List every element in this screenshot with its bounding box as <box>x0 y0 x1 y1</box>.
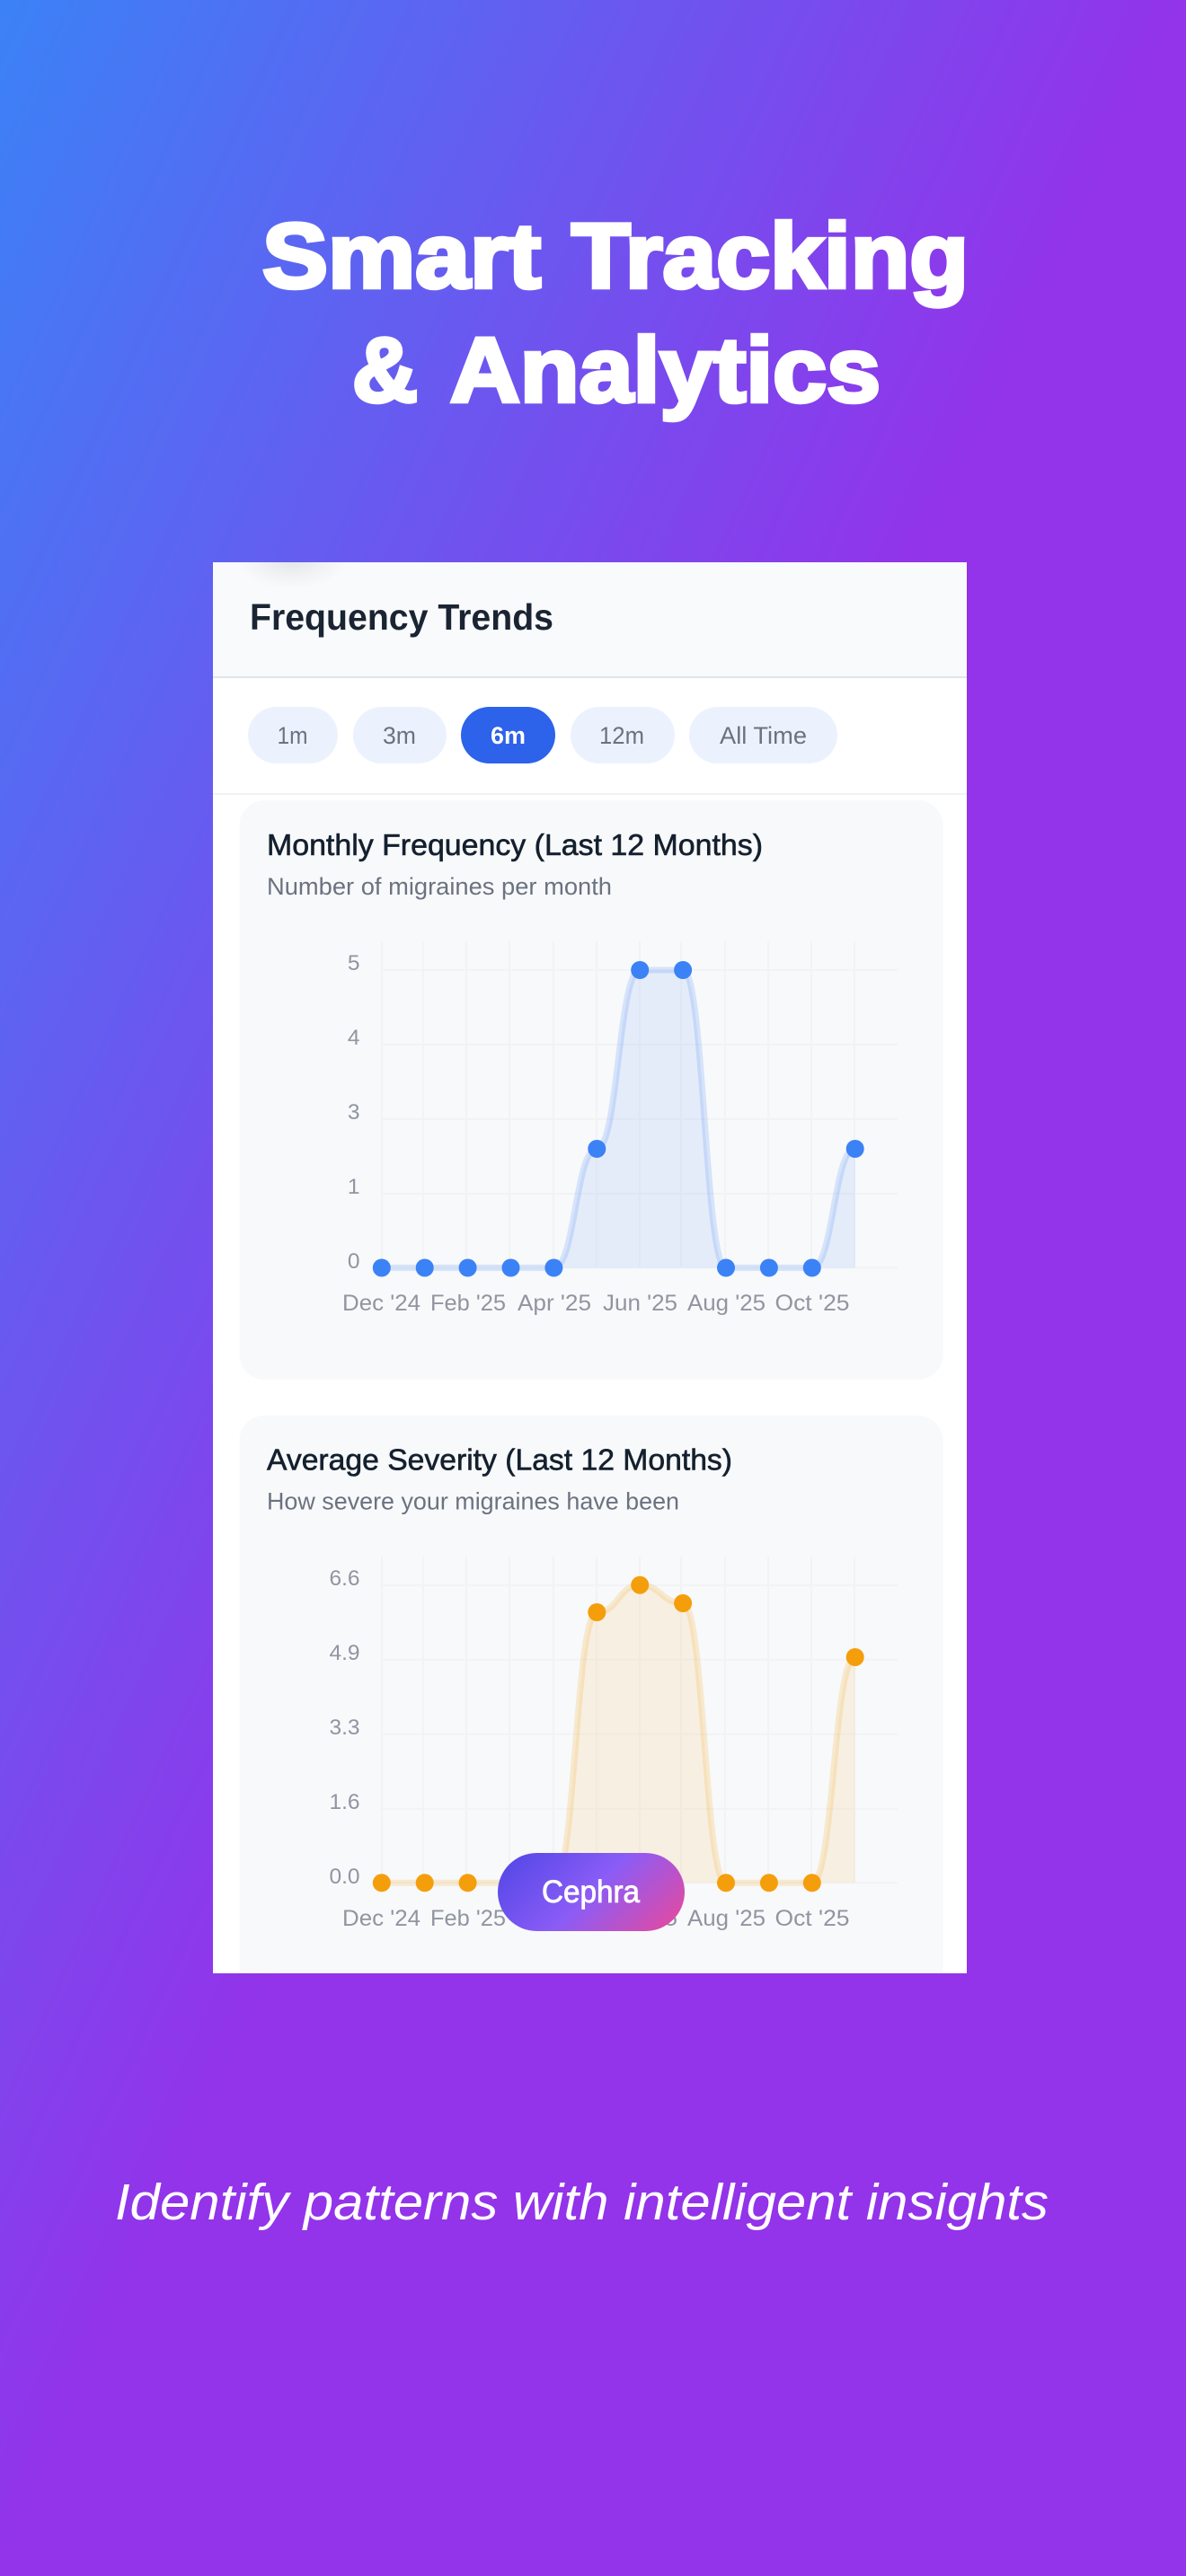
chart title: Average Severity (Last 12 Months) <box>267 1442 732 1477</box>
line chart: frequency: 5 <box>348 951 359 975</box>
panel: average severity <box>266 1448 898 1930</box>
line chart: frequency: Apr '25 <box>518 1291 591 1316</box>
line chart: severity: Jun '25 <box>603 1906 677 1931</box>
line chart: severity: 1.6 <box>329 1790 359 1814</box>
line chart: severity: 4.9 <box>329 1641 359 1665</box>
title: Tracking <box>571 205 969 307</box>
line chart: severity: Apr '25 <box>518 1906 591 1931</box>
line chart: frequency: 1 <box>348 1175 359 1199</box>
chart subtitle: How severe your migraines have been <box>267 1487 679 1514</box>
time range pills: 3m <box>383 722 416 749</box>
line chart: severity <box>329 1557 898 1931</box>
line chart: severity: 6.6 <box>329 1566 359 1591</box>
title: Smart <box>262 205 541 307</box>
line chart: frequency: Jun '25 <box>603 1291 677 1316</box>
line chart: severity: Feb '25 <box>430 1906 506 1931</box>
line chart: frequency: Aug '25 <box>687 1291 766 1316</box>
panel: app screen card <box>213 528 967 2008</box>
line chart: frequency: 4 <box>348 1026 359 1050</box>
tagline: Identify patterns with intelligent insights <box>115 2174 1049 2231</box>
line chart: frequency: Feb '25 <box>430 1291 506 1316</box>
line chart: severity: 0.0 <box>329 1865 359 1889</box>
panel: monthly frequency <box>269 834 898 1315</box>
line chart: severity: Dec '24 <box>342 1906 420 1931</box>
chart subtitle: Number of migraines per month <box>267 873 612 900</box>
line chart: severity: 3.3 <box>329 1716 359 1740</box>
title: Analytics <box>450 319 881 421</box>
line chart: severity: Oct '25 <box>774 1906 850 1931</box>
line chart: severity: Aug '25 <box>687 1906 766 1931</box>
screen header: Frequency Trends <box>250 596 553 638</box>
title <box>262 205 969 421</box>
time range pills: 6m <box>491 722 526 749</box>
line chart: frequency: Oct '25 <box>774 1291 850 1316</box>
line chart: frequency <box>344 956 864 1315</box>
title: & <box>352 319 418 421</box>
time range pills <box>248 707 837 763</box>
chart title: Monthly Frequency (Last 12 Months) <box>267 828 763 861</box>
button: Cephra <box>498 1853 685 1931</box>
button: Cephra: Cephra <box>542 1875 641 1910</box>
line chart: frequency: Dec '24 <box>342 1291 420 1316</box>
time range pills: 1m <box>277 722 307 749</box>
time range pills: All Time <box>720 722 807 749</box>
line chart: frequency: 0 <box>348 1249 359 1274</box>
line chart: frequency: 3 <box>348 1100 359 1125</box>
screen header <box>213 562 967 678</box>
time range pills: 12m <box>599 722 644 749</box>
